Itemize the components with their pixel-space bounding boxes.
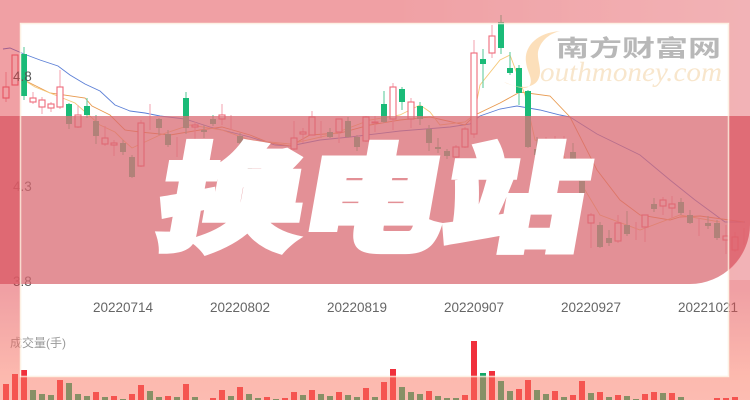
- candle wicks: falling: [24, 15, 717, 248]
- candlestick chart: [3, 15, 745, 254]
- moving average line: short: [24, 55, 720, 230]
- moving average line: medium: [24, 80, 744, 222]
- logo latin name: outhmoney.com: [540, 57, 722, 87]
- title: 换电站: [148, 107, 604, 275]
- moving average line: long: [3, 48, 745, 222]
- x axis dates: 20221021: [678, 300, 738, 315]
- frame top-right highlight: [375, 0, 750, 280]
- volume label: 成交量(手): [10, 335, 66, 350]
- band right edge: [729, 116, 750, 270]
- candle wicks: rising: [6, 25, 744, 254]
- volume bars: rising: [3, 341, 738, 400]
- logo: southmoney: [504, 31, 722, 88]
- candle bodies: falling: [21, 22, 720, 247]
- x axis dates: 20220714: [93, 300, 154, 315]
- y axis labels: [13, 69, 32, 289]
- logo chinese name: 南方财富网: [556, 35, 721, 61]
- x axis dates: 20220819: [327, 300, 387, 315]
- y axis labels: 4.8: [13, 69, 32, 84]
- x axis dates: 20220907: [444, 300, 504, 315]
- candle bodies: rising: [3, 36, 738, 250]
- x axis dates: 20220927: [561, 300, 621, 315]
- x axis dates: [93, 300, 738, 315]
- volume bars: falling: [30, 373, 684, 400]
- y axis labels: 4.3: [13, 179, 32, 194]
- logo swoosh: [504, 31, 560, 88]
- translucent band: [0, 116, 750, 284]
- band left edge: [0, 116, 20, 284]
- x axis dates: 20220802: [210, 300, 270, 315]
- y axis labels: 3.8: [13, 274, 32, 289]
